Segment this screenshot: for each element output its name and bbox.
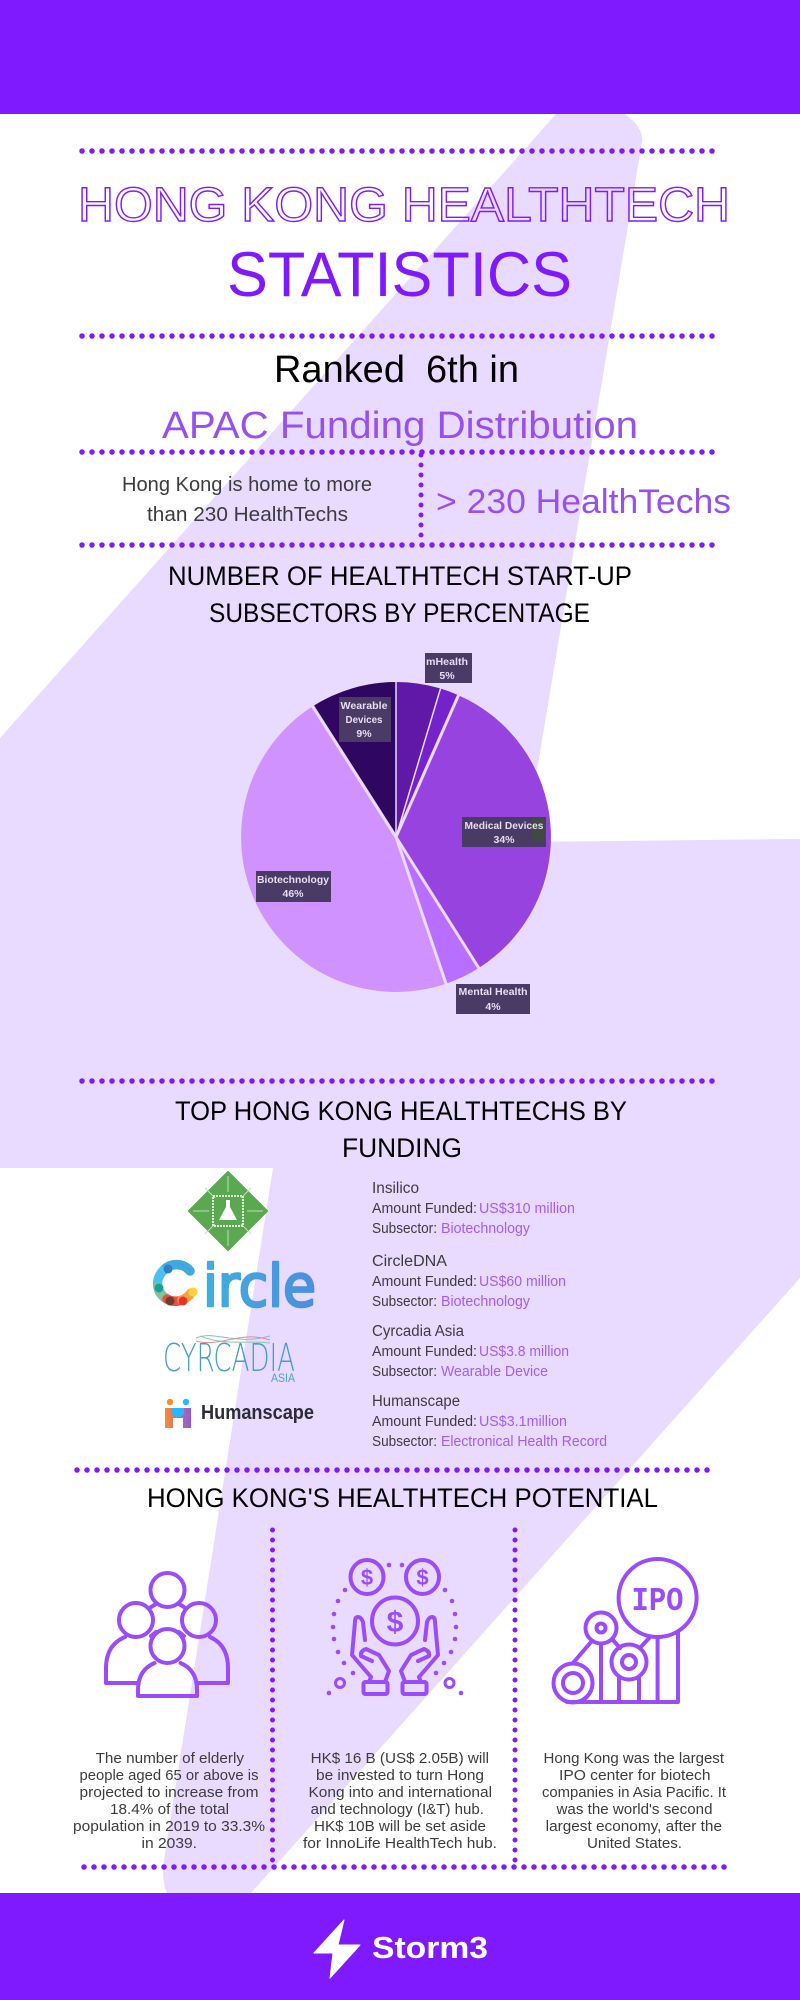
slice: wearable devices bbox=[313, 682, 396, 837]
footer banner bbox=[0, 1893, 800, 2000]
logo: Insilico bbox=[189, 1172, 267, 1250]
column: investment: for InnoLife HealthTech hub. bbox=[303, 1836, 497, 1852]
column: investment bbox=[303, 1751, 497, 1852]
logo: Humanscape: Humanscape bbox=[201, 1402, 314, 1424]
label: mHealth bbox=[425, 653, 472, 683]
icon: hands with coins: $ bbox=[387, 1606, 404, 1639]
entry: CircleDNA bbox=[372, 1253, 566, 1310]
label: medical devices bbox=[462, 817, 546, 847]
entry: Cyrcadia Asia: Subsector: bbox=[372, 1364, 437, 1380]
column: elderly population: in 2039. bbox=[142, 1836, 197, 1852]
ranking heading bbox=[162, 349, 638, 447]
label: mental health: Mental Health bbox=[458, 986, 528, 998]
logo: Cyrcadia Asia bbox=[163, 1336, 295, 1385]
funding heading bbox=[175, 1096, 627, 1163]
left hand bbox=[352, 1617, 389, 1694]
stat value: > 230 HealthTechs bbox=[436, 483, 731, 521]
column: investment: HK$ 16 B (US$ 2.05B) will bbox=[311, 1751, 489, 1767]
icon: lightning bolt bbox=[314, 1920, 360, 1978]
entry: CircleDNA: Amount Funded: bbox=[372, 1274, 477, 1290]
icon: people group bbox=[106, 1573, 228, 1696]
pie chart: subsectors bbox=[241, 653, 551, 1014]
funding list bbox=[372, 1180, 607, 1450]
logo: Cyrcadia Asia: ASIA bbox=[271, 1371, 295, 1385]
column: elderly population: people aged 65 or above is bbox=[80, 1768, 258, 1784]
slice: other bbox=[396, 688, 458, 837]
funding heading: TOP HONG KONG HEALTHTECHS BY bbox=[175, 1096, 627, 1126]
label: medical devices: Medical Devices bbox=[464, 820, 544, 832]
pie chart heading bbox=[168, 561, 632, 628]
column: elderly population: The number of elderly bbox=[96, 1751, 245, 1767]
column: IPO center: Hong Kong was the largest bbox=[544, 1751, 724, 1767]
entry: Cyrcadia Asia: Cyrcadia Asia bbox=[372, 1323, 464, 1340]
slice: biotechnology bbox=[241, 706, 446, 992]
column: IPO center: largest economy, after the bbox=[546, 1819, 722, 1835]
icon: IPO chart: IPO bbox=[632, 1583, 684, 1620]
label: biotechnology: 46% bbox=[282, 888, 304, 900]
ranked text: Ranked 6th in bbox=[274, 349, 519, 391]
slice: mHealth bbox=[396, 682, 440, 837]
entry: Cyrcadia Asia: US$3.8 million bbox=[479, 1344, 569, 1360]
stat description: than 230 HealthTechs bbox=[147, 503, 348, 526]
column: investment: Kong into and international bbox=[308, 1785, 492, 1801]
entry: Humanscape: US$3.1million bbox=[479, 1414, 567, 1430]
entry: Insilico bbox=[372, 1180, 575, 1237]
title line 1: outlined: HONG KONG HEALTHTECH bbox=[78, 179, 730, 232]
column: IPO center: IPO center for biotech bbox=[559, 1768, 710, 1784]
pie chart heading: SUBSECTORS BY PERCENTAGE bbox=[209, 598, 590, 628]
entry: Humanscape: Amount Funded: bbox=[372, 1414, 477, 1430]
column: IPO center bbox=[542, 1751, 726, 1852]
column: elderly population: population in 2019 to 33.3% bbox=[73, 1819, 265, 1835]
logo: Cyrcadia Asia: CYRCADIA bbox=[163, 1336, 295, 1380]
entry: Humanscape: Humanscape bbox=[372, 1393, 460, 1410]
wordmark: ircle bbox=[203, 1252, 316, 1320]
entry: Humanscape bbox=[372, 1393, 607, 1450]
entry: CircleDNA: Subsector: bbox=[372, 1294, 437, 1310]
icon: hands with coins bbox=[327, 1560, 463, 1695]
column: IPO center: was the world's second bbox=[555, 1802, 712, 1818]
label: wearable devices: 9% bbox=[356, 728, 372, 740]
stat description bbox=[122, 473, 372, 526]
column: elderly population: projected to increase from bbox=[80, 1785, 258, 1801]
column: IPO center: companies in Asia Pacific. It bbox=[542, 1785, 726, 1801]
entry: Insilico: US$310 million bbox=[479, 1201, 575, 1217]
entry: CircleDNA: Biotechnology bbox=[441, 1294, 531, 1310]
entry: Insilico: Amount Funded: bbox=[372, 1201, 477, 1217]
entry: Cyrcadia Asia: Amount Funded: bbox=[372, 1344, 477, 1360]
label: mHealth: 5% bbox=[439, 670, 455, 682]
icon: IPO chart bbox=[554, 1559, 697, 1702]
entry: Insilico: Subsector: bbox=[372, 1221, 437, 1237]
slice: medical devices bbox=[396, 695, 551, 968]
label: wearable devices: Wearable bbox=[340, 700, 388, 712]
icon: hands with coins: $ bbox=[361, 1565, 373, 1590]
column: investment: HK$ 10B will be set aside bbox=[314, 1819, 486, 1835]
pie chart heading: NUMBER OF HEALTHTECH START-UP bbox=[168, 561, 632, 591]
title bbox=[78, 179, 730, 310]
entry: Cyrcadia Asia bbox=[372, 1323, 569, 1380]
colour ring bbox=[158, 1265, 191, 1301]
entry: Humanscape: Subsector: bbox=[372, 1434, 437, 1450]
column: elderly population bbox=[73, 1751, 265, 1852]
label: mental health: 4% bbox=[485, 1001, 501, 1013]
entry: Insilico: Biotechnology bbox=[441, 1221, 531, 1237]
entry: Cyrcadia Asia: Wearable Device bbox=[441, 1364, 548, 1380]
slice: mental health bbox=[396, 837, 479, 984]
label: wearable devices bbox=[339, 697, 391, 742]
column: elderly population: 18.4% of the total bbox=[110, 1802, 229, 1818]
entry: CircleDNA: US$60 million bbox=[479, 1274, 566, 1290]
potential heading: HONG KONG'S HEALTHTECH POTENTIAL bbox=[147, 1483, 658, 1513]
entry: Humanscape: Electronical Health Record bbox=[441, 1434, 607, 1450]
logo: Humanscape bbox=[165, 1399, 314, 1428]
label: medical devices: 34% bbox=[493, 834, 515, 846]
stat description: Hong Kong is home to more bbox=[122, 473, 372, 496]
label: mHealth: mHealth bbox=[426, 656, 468, 668]
funding heading: FUNDING bbox=[342, 1133, 462, 1163]
title line 2: STATISTICS bbox=[227, 240, 572, 310]
label: wearable devices: Devices bbox=[346, 714, 383, 726]
stat row: 230 healthtechs bbox=[122, 473, 731, 526]
column: investment: and technology (I&T) hub. bbox=[311, 1802, 484, 1818]
label: biotechnology bbox=[256, 871, 331, 902]
logo: Circle bbox=[154, 1252, 316, 1320]
APAC funding text: APAC Funding Distribution bbox=[162, 405, 638, 447]
label: mental health bbox=[456, 984, 530, 1014]
top banner bbox=[0, 0, 800, 114]
icon: hands with coins: $ bbox=[416, 1565, 429, 1590]
column: investment: be invested to turn Hong bbox=[316, 1768, 484, 1784]
entry: CircleDNA: CircleDNA bbox=[372, 1253, 448, 1270]
label: biotechnology: Biotechnology bbox=[257, 874, 329, 886]
right hand bbox=[401, 1617, 438, 1694]
column: IPO center: United States. bbox=[587, 1836, 682, 1852]
brand name: Storm3 bbox=[372, 1930, 488, 1965]
entry: Insilico: Insilico bbox=[372, 1180, 419, 1197]
